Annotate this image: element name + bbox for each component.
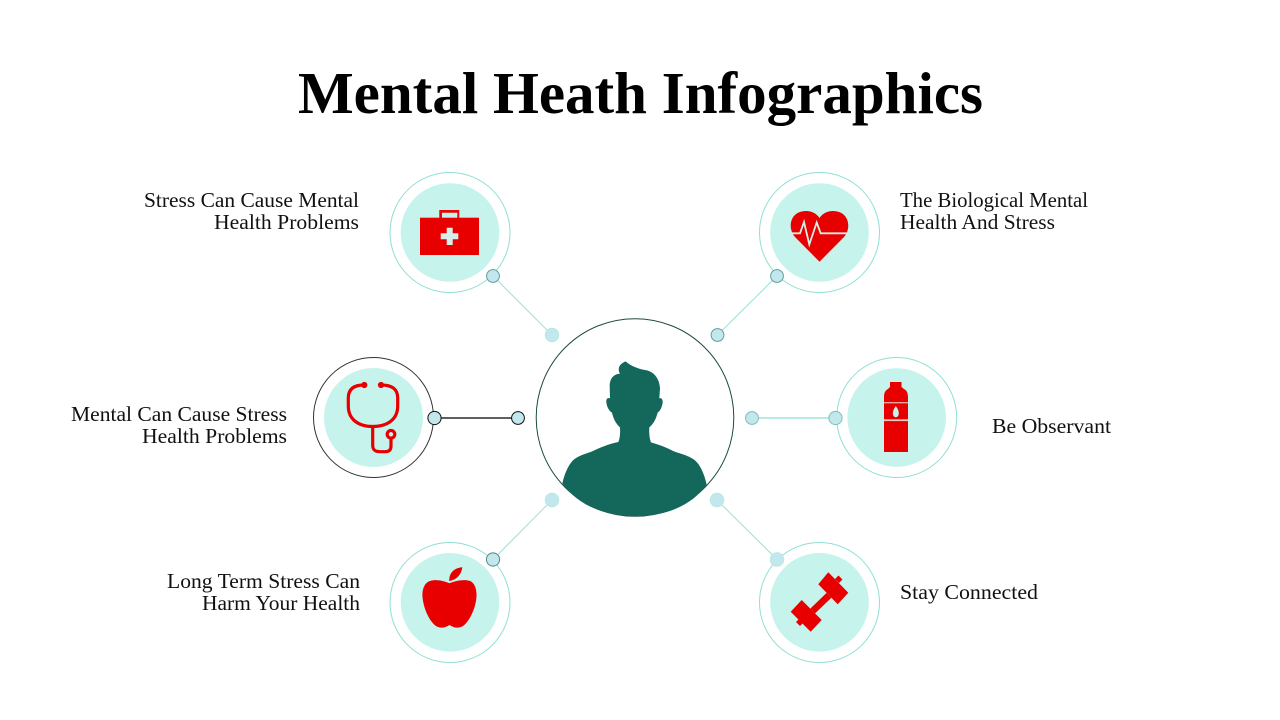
icon: person silhouette: [562, 361, 707, 516]
text: stress can cause mental health problems: [144, 188, 359, 234]
text: stress can cause mental health problems: Health Problems: [214, 210, 359, 234]
text: be observant: Be Observant: [992, 414, 1111, 438]
connector: middle right: [746, 412, 836, 424]
connector: bottom left: [493, 493, 559, 560]
connector: top left: [493, 276, 559, 342]
panel: top left node: [390, 172, 510, 292]
panel: bottom left node: [390, 542, 510, 662]
icon: first aid kit: [420, 210, 479, 255]
text: the biological mental health and stress: Health And Stress: [900, 210, 1055, 234]
panel: middle left node: [314, 358, 441, 478]
text: the biological mental health and stress: The Biological Mental: [900, 188, 1088, 212]
text: long term stress can harm your health: Long Term Stress Can: [167, 569, 360, 593]
text: the biological mental health and stress: [900, 188, 1088, 234]
text: mental can cause stress health problems: Mental Can Cause Stress: [71, 402, 287, 426]
text: long term stress can harm your health: [167, 569, 360, 615]
title: Mental Heath Infographics: [298, 60, 983, 126]
panel: middle right node: [829, 358, 957, 478]
panel: top right node: [760, 172, 880, 292]
icon: water bottle: [884, 382, 908, 452]
icon: dumbbell: [791, 572, 848, 632]
central person circle: [536, 319, 734, 516]
text: mental can cause stress health problems: Health Problems: [142, 424, 287, 448]
panel: bottom right node: [760, 542, 880, 662]
icon: heart with pulse: [791, 211, 848, 262]
connector: bottom right: [710, 493, 777, 560]
icon: apple: [422, 567, 477, 628]
icon: stethoscope: [348, 384, 398, 452]
connector: middle left: [434, 412, 524, 424]
text: stress can cause mental health problems: Stress Can Cause Mental: [144, 188, 359, 212]
text: mental can cause stress health problems: [71, 402, 287, 448]
text: long term stress can harm your health: Harm Your Health: [202, 591, 360, 615]
text: stay connected: Stay Connected: [900, 580, 1038, 604]
connector: top right: [711, 276, 777, 341]
